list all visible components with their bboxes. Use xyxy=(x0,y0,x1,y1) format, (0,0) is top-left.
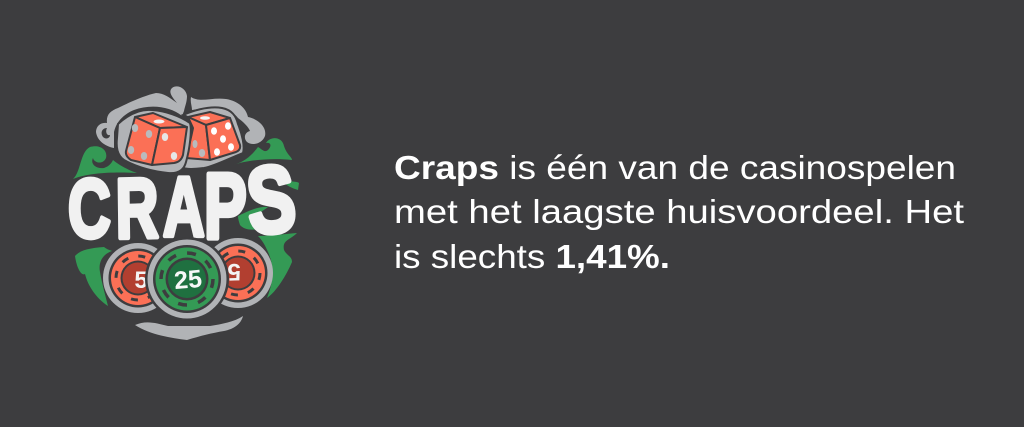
die: right xyxy=(186,112,240,160)
line 3: is slechts 1,41%. xyxy=(394,238,670,275)
craps wordmark: P xyxy=(204,154,247,258)
craps wordmark xyxy=(68,145,300,258)
die: left xyxy=(126,113,187,165)
die: left pips xyxy=(128,120,177,160)
grey swirl ornament: right xyxy=(191,97,265,144)
chip: left 5 xyxy=(103,243,173,313)
description text xyxy=(394,149,964,275)
die: right pips xyxy=(192,116,234,157)
craps wordmark: A xyxy=(163,160,205,255)
chip: right 5 xyxy=(203,238,273,308)
bottom ribbon xyxy=(135,316,243,340)
die frame: right xyxy=(180,107,244,169)
craps wordmark: S xyxy=(243,145,300,254)
logo: craps xyxy=(68,86,300,340)
craps wordmark: R xyxy=(115,162,159,257)
line 1: Craps is één van de casinospelen xyxy=(394,149,956,186)
line 2: met het laagste huisvoordeel. Het xyxy=(394,193,964,230)
grey swirl ornament: left xyxy=(96,86,187,148)
chip: left 5: 5 xyxy=(134,267,148,294)
die frame: left xyxy=(117,110,191,173)
chip: center 25: 25 xyxy=(173,265,203,295)
craps wordmark: C xyxy=(68,163,111,255)
chip: right 5: 5 xyxy=(227,258,241,285)
green ornaments xyxy=(73,138,299,306)
chip: center 25 xyxy=(145,237,229,321)
